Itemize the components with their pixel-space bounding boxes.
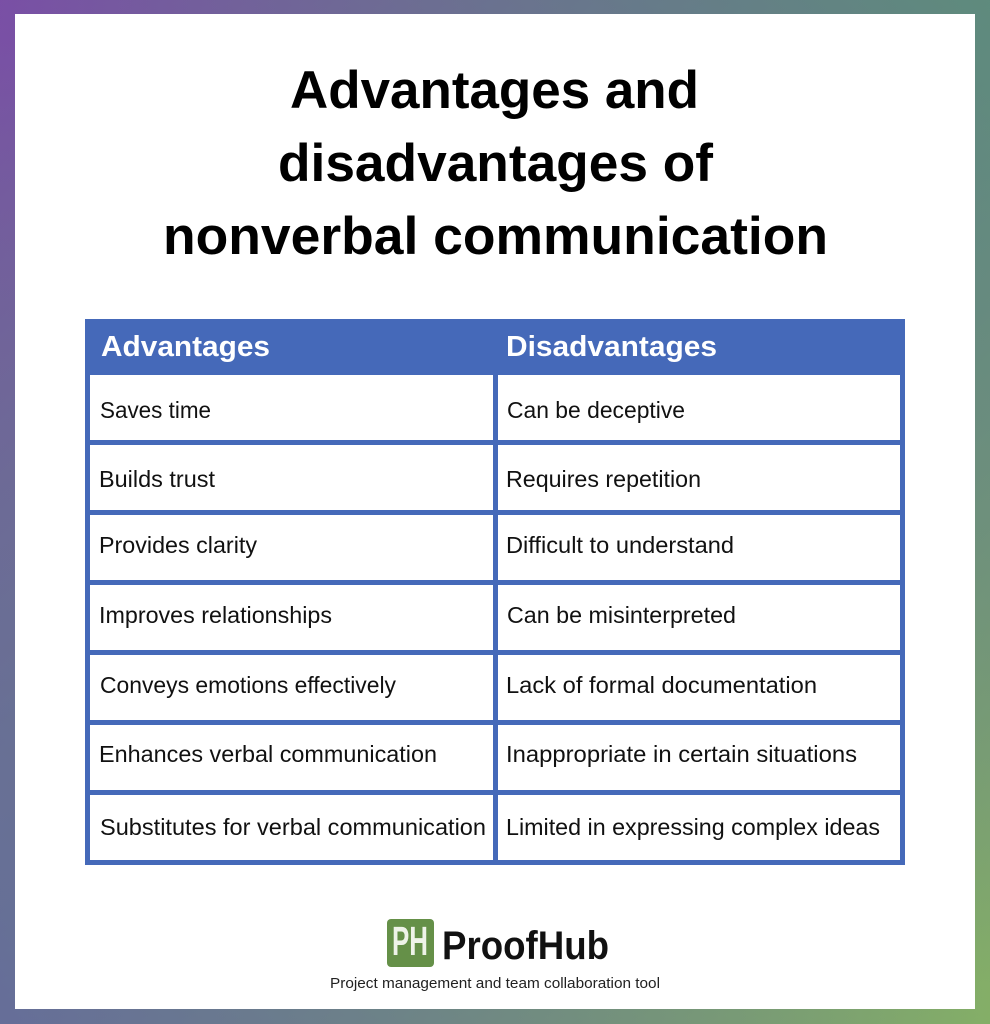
header labels: Advantages [101, 331, 270, 363]
disadvantages column: Can be misinterpreted [507, 602, 736, 628]
brand name: ProofHub [442, 924, 609, 968]
header labels [101, 331, 717, 363]
title: disadvantages of [278, 134, 713, 193]
advantages column: Provides clarity [99, 532, 258, 558]
icon: PH badge: PH [392, 918, 428, 964]
disadvantages column [506, 397, 880, 840]
ProofHub logo [387, 918, 609, 968]
advantages column: Conveys emotions effectively [100, 672, 396, 698]
disadvantages column: Lack of formal documentation [506, 672, 817, 698]
disadvantages column: Can be deceptive [507, 397, 685, 423]
header labels: Disadvantages [506, 331, 717, 363]
table cells [90, 375, 900, 860]
comparison table [85, 319, 905, 865]
title: nonverbal communication [163, 207, 828, 266]
advantages column [99, 397, 486, 840]
tagline: Project management and team collaboration tool [330, 976, 660, 992]
disadvantages column: Difficult to understand [506, 532, 734, 558]
advantages column: Builds trust [99, 466, 216, 492]
disadvantages column: Inappropriate in certain situations [506, 741, 857, 767]
title: Advantages and [290, 61, 699, 120]
title [163, 61, 828, 266]
advantages column: Enhances verbal communication [99, 741, 437, 767]
disadvantages column: Requires repetition [506, 466, 701, 492]
advantages column: Saves time [100, 397, 211, 423]
advantages column: Improves relationships [99, 602, 332, 628]
table frame and header band [85, 319, 905, 865]
icon: PH badge [387, 918, 434, 967]
disadvantages column: Limited in expressing complex ideas [506, 814, 880, 840]
advantages column: Substitutes for verbal communication [100, 814, 486, 840]
